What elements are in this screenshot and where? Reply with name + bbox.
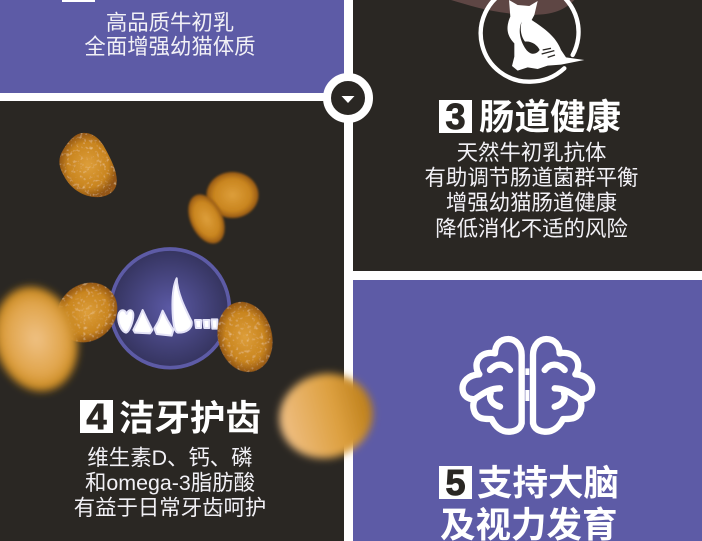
text: gut health description: 降低消化不适的风险 xyxy=(435,217,628,241)
text: dental description: 有益于日常牙齿呵护 xyxy=(74,496,266,520)
badge: 3: 3 xyxy=(445,96,466,137)
heading: gut health xyxy=(439,96,621,137)
badge: 4 xyxy=(80,400,113,433)
text: gut health description: 天然牛初乳抗体 xyxy=(457,141,606,165)
icon: cat in circle xyxy=(478,0,584,84)
badge: 5 xyxy=(439,466,472,499)
badge: 3 xyxy=(439,100,472,133)
kibble: blurred right xyxy=(270,363,382,469)
heading remnant: number badge xyxy=(62,0,95,2)
icon: scroll-down button xyxy=(323,73,373,123)
badge: 4: 4 xyxy=(86,396,107,437)
panel: dental health xyxy=(0,101,344,541)
heading text: 肠道健康 xyxy=(479,97,621,137)
text: colostrum description: 全面增强幼猫体质 xyxy=(84,35,256,59)
text: dental description xyxy=(74,446,266,520)
kibble: blurred left xyxy=(0,277,89,401)
text: gut health description: 有助调节肠道菌群平衡 xyxy=(425,166,638,190)
kibble: top right xyxy=(206,172,258,218)
kibble: right of teeth icon xyxy=(210,296,280,378)
kibble: middle xyxy=(181,189,232,249)
image: bowl edge xyxy=(452,0,574,15)
heading: brain and vision xyxy=(439,462,619,541)
text: colostrum description: 高品质牛初乳 xyxy=(106,11,234,35)
kibble: top left xyxy=(59,133,117,197)
icon: teeth in circle xyxy=(111,247,231,370)
kibble: left of teeth icon xyxy=(44,270,130,355)
panel: colostrum (top left) xyxy=(0,0,344,93)
text: dental description: 维生素D、钙、磷 xyxy=(87,446,253,470)
heading text: 洁牙护齿 xyxy=(119,398,261,438)
icon: brain xyxy=(459,336,596,435)
heading text: 支持大脑 xyxy=(477,463,619,503)
text: dental description: 和omega-3脂肪酸 xyxy=(85,470,255,494)
panel: brain and vision xyxy=(353,280,702,541)
text: gut health description xyxy=(425,141,638,241)
heading: dental xyxy=(80,396,261,438)
text: gut health description: 增强幼猫肠道健康 xyxy=(446,191,617,215)
panel: gut health xyxy=(353,0,702,271)
text: colostrum description xyxy=(84,11,256,59)
badge: 5: 5 xyxy=(445,462,466,503)
